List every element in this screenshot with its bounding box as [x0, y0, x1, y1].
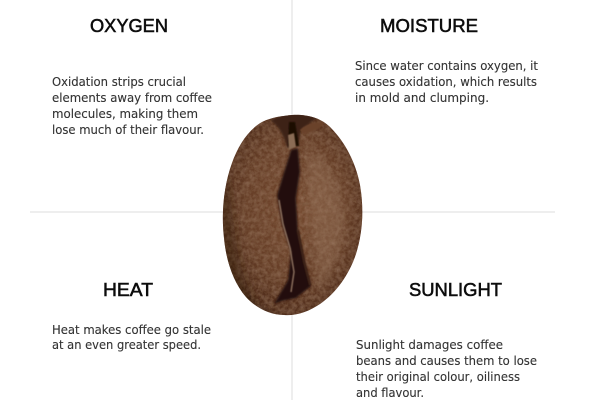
text block: moisture: Since water contains oxygen, it	[355, 59, 538, 73]
text block: moisture: causes oxidation, which results	[355, 75, 537, 89]
heading: heat: HEAT	[103, 279, 153, 300]
panel: oxygen	[52, 15, 212, 137]
text block: sunlight: and flavour.	[356, 386, 424, 400]
text block: sunlight: Sunlight damages coffee	[356, 338, 503, 352]
text block: heat: at an even greater speed.	[52, 338, 201, 352]
text block: sunlight: beans and causes them to lose	[356, 354, 537, 368]
text block: sunlight: their original colour, oiliness	[356, 370, 520, 384]
text block: moisture	[355, 59, 538, 105]
text block: moisture: in mold and clumping.	[355, 91, 489, 105]
panel: moisture	[355, 15, 538, 105]
text block: heat: Heat makes coffee go stale	[52, 323, 211, 337]
text block: oxygen: Oxidation strips crucial	[52, 75, 186, 89]
text block: oxygen: lose much of their flavour.	[52, 123, 204, 137]
text block: oxygen: elements away from coffee	[52, 91, 212, 105]
heading: sunlight: SUNLIGHT	[409, 279, 502, 300]
heading: moisture: MOISTURE	[380, 15, 478, 36]
panel: sunlight	[356, 279, 537, 400]
text block: sunlight	[356, 338, 537, 400]
text block: oxygen: molecules, making them	[52, 107, 198, 121]
icon: coffee bean	[218, 112, 366, 318]
heading: oxygen: OXYGEN	[90, 15, 168, 36]
text block: oxygen	[52, 75, 212, 137]
panel: heat	[52, 279, 211, 352]
text block: heat	[52, 323, 211, 352]
